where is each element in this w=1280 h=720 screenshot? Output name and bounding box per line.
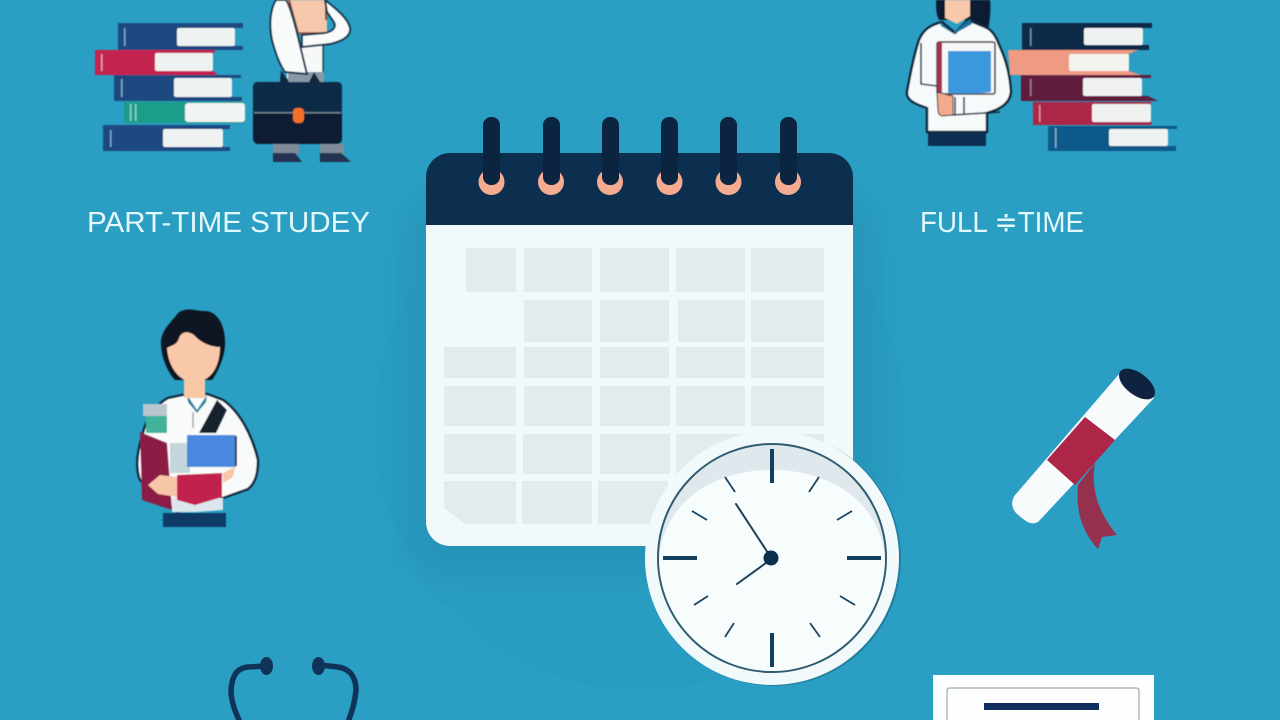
icon: person with briefcase: [253, 0, 351, 162]
icon: stethoscope: [231, 657, 356, 720]
icon: left book stack: [95, 23, 245, 151]
icon: student with books: [137, 310, 258, 527]
icon: clock: [645, 431, 901, 686]
panel: calendar: [426, 117, 853, 546]
heading: full-time: FULL ≑TIME: [920, 207, 1084, 239]
icon: right book stack: [1008, 23, 1177, 151]
calendar binding rings: [478, 117, 801, 195]
icon: certificate: [933, 675, 1154, 720]
icon: person holding book: [907, 0, 1011, 146]
heading: part-time study: PART-TIME STUDEY: [87, 207, 370, 239]
calendar grid: [444, 248, 824, 524]
calendar page: [426, 225, 853, 546]
icon: diploma scroll: [1012, 363, 1160, 549]
calendar header: [426, 153, 853, 225]
